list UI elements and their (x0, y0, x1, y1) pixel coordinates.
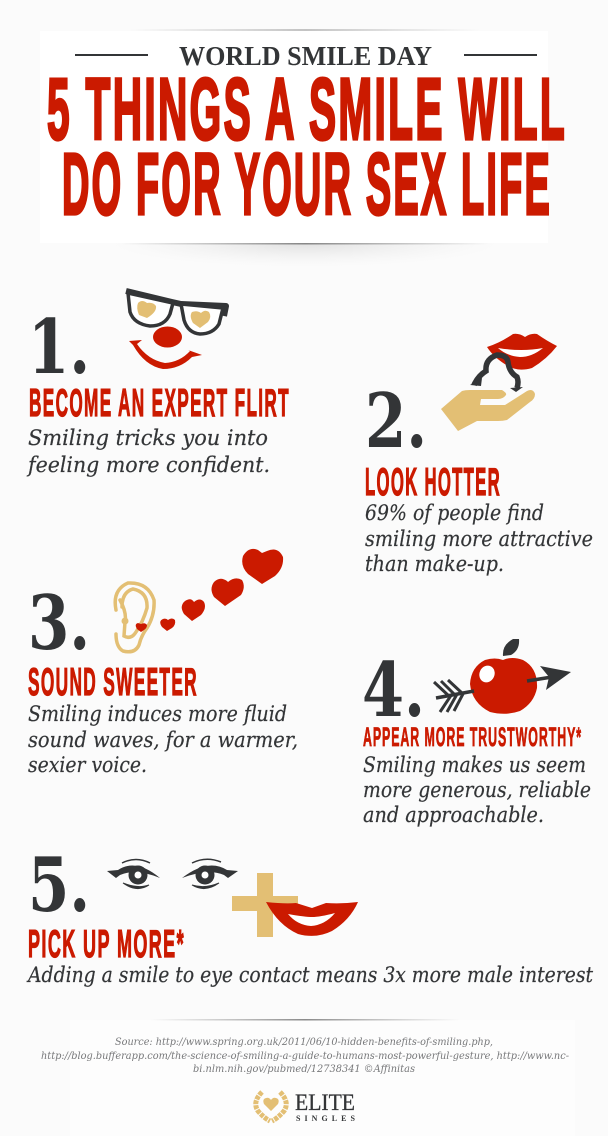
body text 4 (363, 753, 591, 827)
body text 2 (365, 501, 593, 576)
logo: elite singles: SINGLES (296, 1114, 356, 1123)
panel: item 4 (362, 639, 591, 827)
panel: item 2 (365, 334, 593, 576)
body text 3: sound waves, for a warmer, (28, 728, 298, 752)
body text 4: Smiling makes us seem (363, 753, 586, 777)
icon: glasses and clown face (126, 291, 226, 369)
body text 3: sexier voice. (28, 753, 147, 777)
body text 3 (28, 702, 298, 777)
logo: elite singles: ELITE (295, 1090, 355, 1115)
source text (41, 1037, 570, 1075)
body text 3: Smiling induces more fluid (28, 702, 287, 726)
icon: lips and hand with pear (441, 334, 557, 431)
body text 1 (26, 426, 270, 477)
panel: item 1 (26, 291, 290, 477)
icon: eyes plus smile (107, 859, 358, 937)
icon: ear and hearts (115, 549, 283, 652)
number 2: 2. (365, 377, 427, 465)
logo: elite singles (256, 1090, 356, 1123)
body text 2: than make-up. (365, 552, 504, 576)
number 1: 1. (28, 303, 90, 391)
body text 4: and approachable. (363, 803, 544, 827)
source text: Source: http://www.spring.org.uk/2011/06/10-hidden-benefits-of-smiling.php, (115, 1037, 493, 1048)
panel: item 5: PICK UP MORE* (28, 923, 185, 966)
panel: item 3: SOUND SWEETER (28, 661, 198, 704)
number 3: 3. (28, 579, 90, 667)
number 5: 5. (28, 841, 90, 929)
decorative title rule left (75, 54, 148, 56)
text: BECOME AN EXPERT FLIRT (29, 382, 290, 425)
panel: title (40, 29, 567, 267)
heading: world smile day: WORLD SMILE DAY (179, 41, 432, 71)
body text 1: feeling more confident. (26, 453, 270, 477)
source text: bi.nlm.nih.gov/pubmed/12738341 ©Affinitas (193, 1064, 415, 1075)
body text 2: 69% of people find (365, 501, 544, 525)
body text 2: smiling more attractive (365, 527, 593, 551)
number 4: 4. (362, 646, 425, 734)
panel: footer (41, 1019, 575, 1136)
icon: apple and arrow (434, 639, 571, 714)
panel: item 5 (26, 841, 593, 987)
body text 1: Smiling tricks you into (28, 426, 268, 450)
decorative title rule right (464, 54, 537, 56)
source text: http://blog.bufferapp.com/the-science-of-smiling-a-guide-to-humans-most-powerful-gesture, http://www.nc- (41, 1051, 570, 1062)
panel: item 3 (28, 549, 298, 777)
